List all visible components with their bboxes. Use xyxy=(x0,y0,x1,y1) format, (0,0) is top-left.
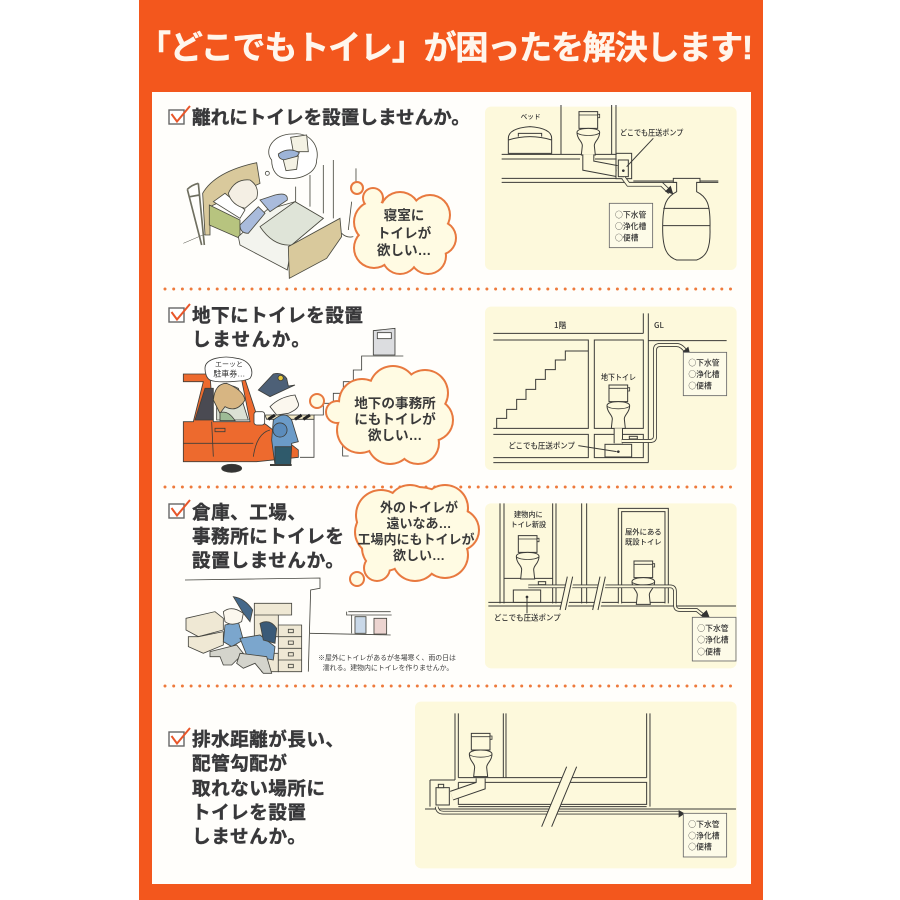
heading 2: しませんか。 xyxy=(192,329,310,350)
diagram 1: ベッド xyxy=(521,111,541,121)
note text: ※屋外にトイレがあるが冬場寒く、雨の日は xyxy=(318,653,456,662)
thought bubble 3: 外のトイレが xyxy=(380,500,458,515)
check icon 1 xyxy=(169,106,190,124)
heading 3: 倉庫、工場、 xyxy=(192,502,306,523)
thought bubble 1: 欲しい… xyxy=(377,242,431,258)
diagram 2: 地下トイレ xyxy=(601,372,636,383)
illustration: parking guard: 駐車券… xyxy=(213,369,245,379)
heading 3 xyxy=(192,502,344,571)
thought bubble 2: 地下の事務所 xyxy=(354,395,436,411)
diagram 3: ○浄化槽 xyxy=(697,635,729,646)
divider dots 1 xyxy=(165,288,735,290)
diagram 3 xyxy=(485,503,737,668)
diagram 1: どこでも圧送ポンプ xyxy=(620,128,683,139)
heading 1: 離れにトイレを設置しませんか。 xyxy=(192,107,470,128)
illustration: bedroom xyxy=(183,134,356,278)
thought bubble 1: 寝室に xyxy=(384,207,424,223)
thought bubble 1 xyxy=(350,181,457,275)
divider dots 3 xyxy=(165,684,735,688)
thought bubble 2 xyxy=(309,365,454,465)
check icon 3 xyxy=(169,500,190,518)
diagram 1: ○浄化槽 xyxy=(615,221,646,232)
diagram 2: ○便槽 xyxy=(688,381,712,392)
diagram 4: ○浄化槽 xyxy=(688,830,720,841)
diagram 1 xyxy=(485,105,737,270)
diagram 2: 1階 xyxy=(554,320,566,331)
orange sheet xyxy=(139,0,763,900)
check icon 2 xyxy=(169,304,190,322)
heading 4: しませんか。 xyxy=(192,826,306,847)
divider dots 2 xyxy=(165,486,735,488)
thought bubble 3: 工場内にもトイレが xyxy=(357,532,475,547)
section 1: annex toilet xyxy=(169,105,737,278)
heading 4: 取れない場所に xyxy=(192,778,325,799)
thought bubble 2: にもトイレが xyxy=(354,411,436,427)
diagram 1: ○便槽 xyxy=(615,232,639,243)
diagram 3: 建物内に xyxy=(514,510,543,520)
diagram 2: どこでも圧送ポンプ xyxy=(508,440,575,451)
diagram 4: ○下水管 xyxy=(688,819,720,830)
diagram 1: ○下水管 xyxy=(615,209,646,220)
diagram 4 xyxy=(415,702,737,868)
heading 2 xyxy=(192,305,363,350)
section 3: warehouse and factory xyxy=(169,484,737,673)
thought bubble 1: トイレが xyxy=(377,225,432,241)
illustration: parking guard: エーッと xyxy=(215,361,243,369)
check icon 4 xyxy=(169,728,190,746)
heading 4: 配管勾配が xyxy=(192,753,287,774)
heading 3: 設置しませんか。 xyxy=(192,550,344,571)
heading 4 xyxy=(192,729,344,847)
diagram 3: ○下水管 xyxy=(697,623,729,634)
thought bubble 3: 欲しい… xyxy=(393,548,445,563)
heading 2: 地下にトイレを設置 xyxy=(192,305,363,326)
heading 4: トイレを設置 xyxy=(192,802,306,823)
thought bubble 3: 遠いなあ… xyxy=(386,516,452,531)
thought bubble 3 xyxy=(349,484,480,587)
heading 3: 事務所にトイレを xyxy=(192,526,344,547)
white content panel xyxy=(152,92,751,884)
diagram 2: GL xyxy=(654,320,664,331)
diagram 4: ○便槽 xyxy=(688,842,712,853)
note text xyxy=(318,653,456,672)
illustration: warehouse workers xyxy=(185,578,392,673)
diagram 3: どこでも圧送ポンプ xyxy=(494,613,561,624)
note text: 濡れる。建物内にトイレを作りませんか。 xyxy=(323,663,453,672)
section 2: basement toilet xyxy=(169,304,737,472)
diagram 2 xyxy=(485,307,737,470)
illustration: parking guard xyxy=(183,328,403,472)
title: 「どこでもトイレ」が困ったを解決します! xyxy=(138,29,753,66)
diagram 2: ○下水管 xyxy=(688,357,720,368)
diagram 3: 既設トイレ xyxy=(625,536,662,547)
diagram 3: 屋外にある xyxy=(625,526,662,537)
diagram 3: トイレ新設 xyxy=(510,520,546,530)
diagram 3: ○便槽 xyxy=(697,646,721,657)
heading 4: 排水距離が長い、 xyxy=(192,729,344,750)
diagram 2: ○浄化槽 xyxy=(688,369,720,380)
section 4: long drainage distance xyxy=(169,702,737,868)
thought bubble 2: 欲しい… xyxy=(368,427,422,443)
